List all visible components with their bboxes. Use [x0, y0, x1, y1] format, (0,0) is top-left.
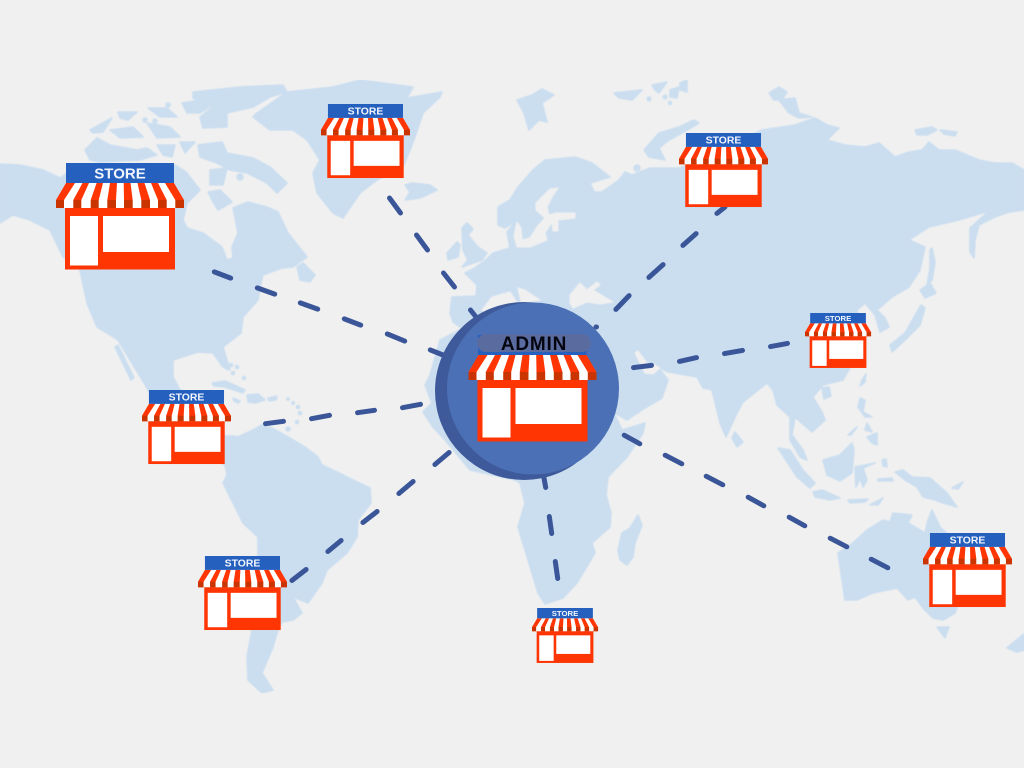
North America	[0, 164, 307, 465]
connector: south store to admin	[544, 478, 558, 578]
Southeast Asian islands	[778, 398, 893, 505]
Ireland	[447, 242, 460, 260]
Newfoundland	[297, 263, 315, 282]
United Kingdom	[462, 223, 487, 267]
store: South America	[198, 556, 287, 630]
store: Russia	[679, 133, 768, 207]
connector: Australia store to admin	[624, 435, 888, 568]
Baja California	[115, 345, 134, 380]
Sakhalin	[927, 248, 935, 285]
Florida	[217, 350, 228, 370]
store: Caribbean	[142, 390, 231, 464]
store: Greenland: STORE	[348, 107, 383, 118]
store: Asia: STORE	[825, 314, 851, 323]
Africa	[423, 320, 645, 604]
Arctic Russian islands	[614, 80, 957, 171]
store: Russia: STORE	[706, 136, 741, 147]
Baltic Sea	[514, 188, 575, 247]
Arctic archipelago	[85, 85, 287, 210]
Madagascar	[618, 515, 642, 565]
store: North America large	[56, 163, 184, 270]
connector: Russia store to admin	[596, 207, 725, 327]
store: Greenland	[321, 104, 410, 178]
world map	[0, 80, 1024, 693]
Mediterranean Sea	[482, 288, 540, 315]
Novaya Zemlya	[644, 120, 699, 160]
Eurasia	[450, 118, 1024, 460]
admin store: ADMIN	[501, 334, 567, 355]
Greenland	[253, 80, 442, 218]
connector: South America store to admin	[292, 452, 449, 580]
South America	[223, 425, 371, 693]
admin store	[468, 334, 596, 442]
Tasmania	[937, 627, 949, 638]
New Guinea	[895, 470, 957, 507]
New Zealand	[1007, 634, 1024, 652]
store: Caribbean: STORE	[169, 393, 204, 404]
connector: Caribbean store to admin	[266, 404, 420, 424]
Taiwan	[860, 374, 866, 386]
store: South America: STORE	[225, 559, 260, 570]
Pacific islands	[952, 482, 963, 489]
Persian Gulf	[635, 351, 660, 374]
admin hub circle	[435, 302, 619, 480]
store: Asia	[805, 313, 871, 368]
store: North America large: STORE	[94, 165, 146, 182]
connector: large store to admin	[214, 272, 443, 355]
Svalbard region	[517, 89, 554, 130]
store: Australia	[923, 533, 1012, 607]
connector: Asia store to admin	[634, 343, 788, 368]
Hainan	[822, 387, 831, 399]
store: Australia: STORE	[950, 536, 985, 547]
Iceland	[405, 183, 437, 200]
Australia	[838, 510, 985, 620]
store: South Africa: STORE	[552, 609, 578, 618]
Japan	[890, 283, 936, 352]
Black and Caspian Seas	[570, 282, 613, 308]
Sri Lanka	[732, 432, 743, 447]
store: South Africa	[532, 608, 598, 663]
Caribbean islands	[212, 364, 302, 431]
connector: north store to admin	[390, 198, 476, 317]
